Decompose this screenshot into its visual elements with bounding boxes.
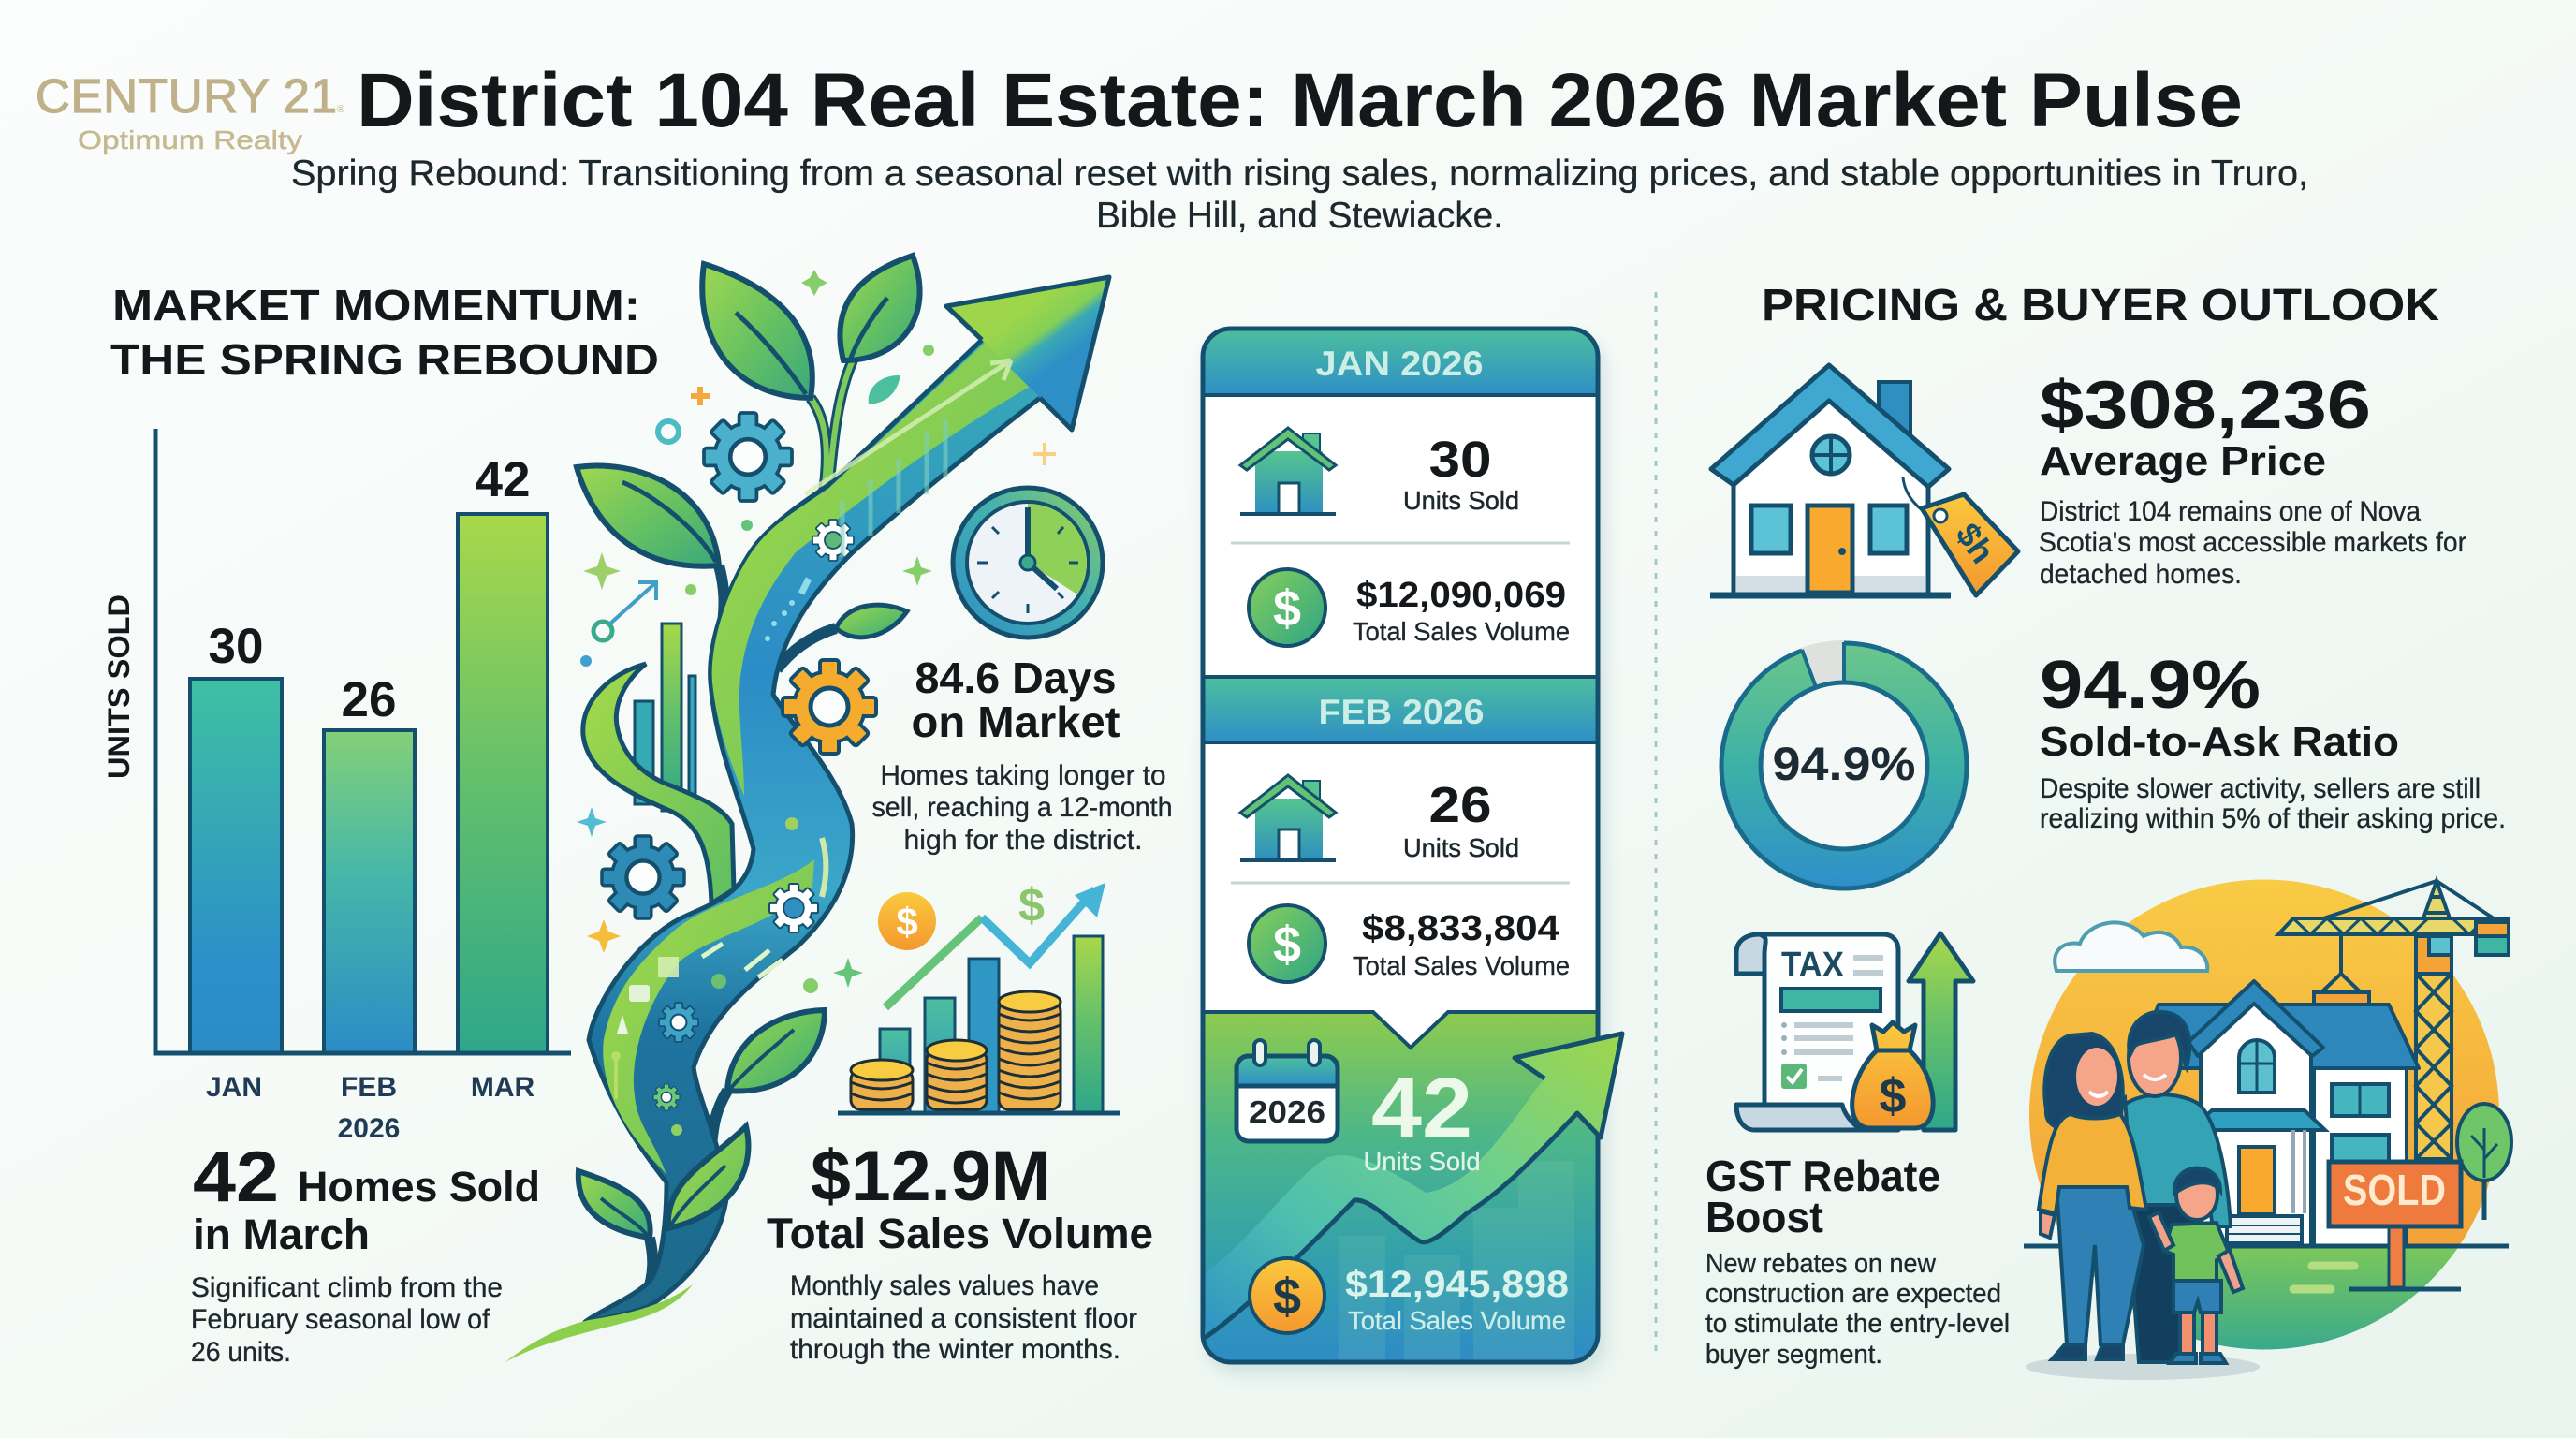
logo: Century 21 Optimum Realty: Optimum Realty [78,125,302,154]
panel: monthly comparison [1203,329,1622,1372]
March section background [1203,1012,1598,1362]
month labels: 2026 [338,1113,400,1144]
bar: March 42: 42 [476,452,530,507]
section heading: market momentum [110,281,659,384]
rising bars [880,936,1103,1113]
arrow shaft green side [712,343,1034,796]
January sales volume: $12,090,069 [1356,576,1566,615]
lower stem green band [603,859,814,1175]
January units: 30 [1428,432,1492,488]
illustration: growth vine and arrow [505,256,1109,1362]
icon: gold dollar: $ [1273,1269,1301,1325]
ground line [2024,1243,2509,1249]
SOLD sign [2329,1162,2461,1289]
February units: Units Sold [1403,833,1519,862]
faded bars [1339,1161,1574,1367]
stat: GST rebate boost: New rebates on new [1705,1249,1937,1279]
icon: February house [1240,775,1336,860]
stat: 42 homes sold in March: Homes Sold [298,1163,540,1211]
icon: calendar 2026 [1237,1040,1338,1141]
subtitle: Spring Rebound: Transitioning from a seasonal reset with rising sales, normalizing prices, and stable opportunities in Truro, [291,154,2308,194]
section heading: market momentum: MARKET MOMENTUM: [112,281,640,330]
lawn details [2293,1266,2354,1289]
section heading: market momentum: THE SPRING REBOUND [110,335,659,384]
January header: JAN 2026 [1316,345,1483,383]
stat: total sales volume: Total Sales Volume [767,1210,1153,1257]
coin stacks [851,991,1061,1109]
chart axes [155,429,571,1053]
stat: sold-to-ask ratio: 94.9% [2040,648,2261,723]
month labels: JAN [206,1072,262,1103]
background bars [635,624,695,816]
section heading: pricing and buyer outlook: PRICING & BUYER OUTLOOK [1762,281,2439,330]
stat: average price: Average Price [2040,438,2326,484]
icon: coins and bar chart [838,879,1120,1113]
stat: total sales volume: $12.9M [811,1137,1051,1216]
main house [2134,981,2419,1246]
document [1736,934,1898,1130]
icon: January dollar: $ [1273,580,1301,637]
gold dollar coin: $ [896,900,918,944]
stat: GST rebate boost: to stimulate the entry-level [1705,1309,2010,1339]
green lawn [2070,1246,2459,1350]
stat: days on market: high for the district. [904,825,1142,856]
money bag [1852,1022,1933,1128]
stat: GST rebate boost [1705,1152,2010,1370]
stat: sold-to-ask ratio: Sold-to-Ask Ratio [2040,719,2399,765]
stat: GST rebate boost: construction are expected [1705,1279,2001,1309]
logo: Century 21 Optimum Realty: ® [337,104,344,115]
tree [2457,1104,2511,1220]
subtitle: Bible Hill, and Stewiacke. [1096,196,1503,236]
stat: average price [2039,368,2466,590]
icon: February dollar [1249,905,1325,982]
bar: March 42 [458,452,548,1053]
February header: FEB 2026 [1318,693,1485,731]
stat: days on market: on Market [912,697,1120,746]
January units [1403,432,1519,515]
icon: calendar 2026: 2026 [1249,1094,1325,1129]
stat: sold-to-ask ratio: realizing within 5% of their asking price. [2040,803,2506,834]
stat: 42 homes sold in March: Significant climb from the [191,1272,503,1303]
stat: total sales volume: maintained a consistent floor [790,1303,1137,1334]
crane [2278,881,2509,1159]
donut chart: 94.9% [1721,640,1967,888]
main stem and arrow body [585,340,1040,1322]
leaf: bottom centre [668,1126,748,1228]
stat: average price: detached homes. [2040,559,2242,590]
floating leaf [869,375,900,404]
gold dollar coin [878,892,936,950]
leaf: small right [836,605,907,638]
stat: GST rebate boost: GST Rebate [1705,1152,1940,1200]
leaf: top left [702,264,812,398]
February units [1403,777,1519,862]
leaf: bottom left [578,1171,651,1238]
stat: 42 homes sold in March: in March [193,1211,370,1258]
March sales volume: $12,945,898 [1345,1264,1569,1305]
February header [1203,675,1598,744]
stat: 42 homes sold in March: 26 units. [191,1337,291,1368]
February sales volume: Total Sales Volume [1353,951,1570,980]
stat: sold-to-ask ratio: Despite slower activity, sellers are still [2040,773,2481,804]
stat: average price: $308,236 [2040,368,2371,443]
stat: average price: Scotia's most accessible markets for [2039,527,2466,558]
stat: days on market: 84.6 Days [915,653,1116,702]
bar: February 26: 26 [342,672,396,727]
leaf: top right [840,256,920,360]
stat: sold-to-ask ratio [2040,648,2506,834]
logo: Century 21 Optimum Realty: CENTURY 21 [36,69,337,123]
January sales volume [1353,576,1570,646]
January sales volume: Total Sales Volume [1353,617,1570,646]
March units: 42 [1371,1061,1472,1156]
month labels: FEB [341,1072,397,1103]
title: District 104 Real Estate: March 2026 Market Pulse [357,58,2243,143]
stat: days on market: Homes taking longer to [880,760,1166,791]
side crescent leaf [583,664,734,903]
small trend arrow [593,582,656,640]
February units: 26 [1428,777,1492,833]
sun backdrop [2029,880,2499,1246]
month labels: MAR [471,1072,534,1103]
March units [1363,1061,1481,1176]
bar: February 26 [324,672,415,1053]
leaf: lower right [727,1010,825,1092]
stat: 42 homes sold in March: 42 [193,1137,279,1217]
stat: total sales volume: Monthly sales values have [790,1270,1099,1301]
man [2056,1012,2231,1362]
stat: average price: District 104 remains one of Nova [2040,496,2421,527]
cloud [2055,922,2207,971]
axis label: units sold: UNITS SOLD [102,594,136,779]
bar: January 30 [190,619,282,1053]
March sales volume: Total Sales Volume [1348,1306,1566,1335]
icon: tax document with money bag: TAX [1781,946,1845,985]
subtitle [291,154,2308,236]
stat: GST rebate boost: buyer segment. [1705,1340,1882,1370]
March sales volume [1345,1264,1569,1335]
bottom tail [505,1284,693,1362]
up arrow [1909,933,1973,1130]
stat: days on market: sell, reaching a 12-month [872,792,1172,823]
logo: Century 21 Optimum Realty [36,69,344,154]
money bag: $ [1880,1069,1907,1123]
sparkles and dots [577,270,1056,993]
icon: tax document with money bag [1736,933,1973,1130]
leaf stems [646,360,853,1297]
clock icon [953,488,1103,638]
leaf: middle left [577,465,719,566]
icon: January dollar [1249,569,1325,646]
price tag [1903,477,2018,595]
rising wave arrow [1205,1034,1622,1338]
month labels [206,1072,534,1144]
icon: January house [1240,428,1336,514]
donut chart: 94.9%: 94.9% [1773,738,1915,790]
gears [602,413,876,1110]
stat: total sales volume [767,1137,1153,1365]
stat: GST rebate boost: Boost [1705,1193,1823,1241]
February sales volume: $8,833,804 [1362,909,1559,948]
stat: total sales volume: through the winter months. [790,1334,1120,1365]
bar: January 30: 30 [209,619,263,674]
SOLD sign: SOLD [2343,1166,2446,1214]
woman [2039,1034,2146,1359]
icon: gold dollar [1250,1258,1325,1333]
ground shadow [2026,1354,2260,1380]
illustration: family at new home with crane [2024,880,2511,1380]
bar chart: units sold [102,429,571,1144]
green dollar sign: $ [1018,879,1045,932]
price tag: $h [1948,516,2002,570]
icon: house with price tag [1710,365,2018,595]
stem details [805,360,1011,494]
icon: February dollar: $ [1273,917,1301,973]
January header [1203,329,1598,397]
trend line [886,917,982,1007]
boy [2149,1168,2243,1363]
January units: Units Sold [1403,486,1519,515]
arrow head [946,277,1109,430]
March units: Units Sold [1363,1147,1481,1176]
stat: 42 homes sold in March: February seasonal low of [191,1304,490,1335]
February sales volume [1353,909,1570,980]
stat: days on market [872,653,1172,856]
stat: 42 homes sold in March [191,1137,540,1368]
